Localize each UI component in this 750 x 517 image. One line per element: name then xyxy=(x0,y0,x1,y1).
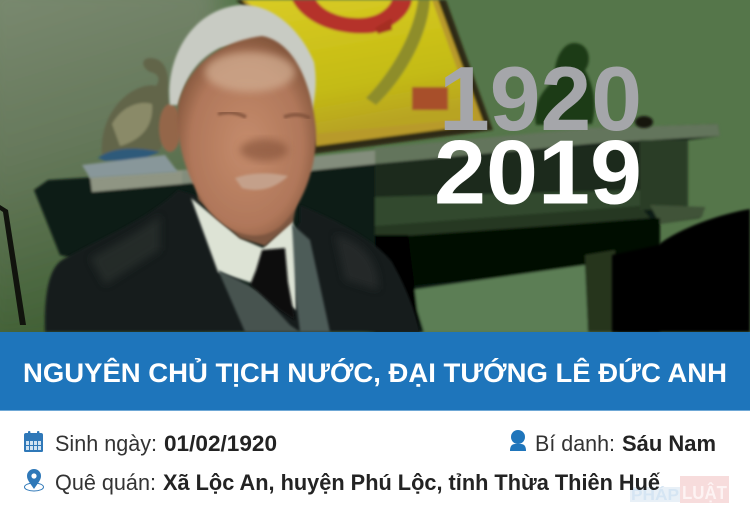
neck xyxy=(195,188,298,248)
title band xyxy=(0,332,750,411)
hair xyxy=(169,5,316,112)
dark object at lower right xyxy=(612,209,750,332)
mantel shelf and dark front xyxy=(34,124,720,332)
jacket xyxy=(45,190,420,332)
birth date: Sinh ngày: xyxy=(55,431,157,456)
info panel xyxy=(24,430,729,504)
year of birth: 1920 xyxy=(439,49,642,150)
forehead highlight xyxy=(205,52,295,92)
framed picture xyxy=(236,0,493,154)
hometown: Xã Lộc An, huyện Phú Lộc, tỉnh Thừa Thiên Huế xyxy=(163,470,661,495)
face xyxy=(177,36,316,236)
birth date: 01/02/1920 xyxy=(164,431,277,456)
year of death: 2019 xyxy=(434,122,642,224)
eyes xyxy=(218,113,310,118)
hometown: Quê quán: xyxy=(55,470,156,495)
jacket lapel highlights xyxy=(94,221,377,287)
tripod leg at left edge xyxy=(0,205,26,325)
watermark xyxy=(630,476,729,504)
watermark: PHÁP xyxy=(631,485,679,504)
birth date xyxy=(55,431,277,456)
watermark: LUẬT xyxy=(682,482,727,503)
nose xyxy=(240,139,288,161)
wall xyxy=(0,0,750,350)
necktie xyxy=(250,248,295,320)
bird figurine on mantel xyxy=(535,43,653,128)
alias xyxy=(535,431,716,456)
icon: calendar xyxy=(24,431,43,452)
title text: NGUYÊN CHỦ TỊCH NƯỚC, ĐẠI TƯỚNG LÊ ĐỨC ANH xyxy=(23,356,727,388)
icon: person xyxy=(510,430,526,451)
icon: location pin xyxy=(24,469,44,491)
knit vest xyxy=(218,224,330,332)
mouth xyxy=(235,173,288,190)
elephant statuette xyxy=(82,58,178,178)
alias: Bí danh: xyxy=(535,431,615,456)
white shirt collar xyxy=(191,198,298,310)
background photo: portrait in front of a mantelpiece xyxy=(0,0,750,350)
ear xyxy=(159,104,181,152)
alias: Sáu Nam xyxy=(622,431,716,456)
